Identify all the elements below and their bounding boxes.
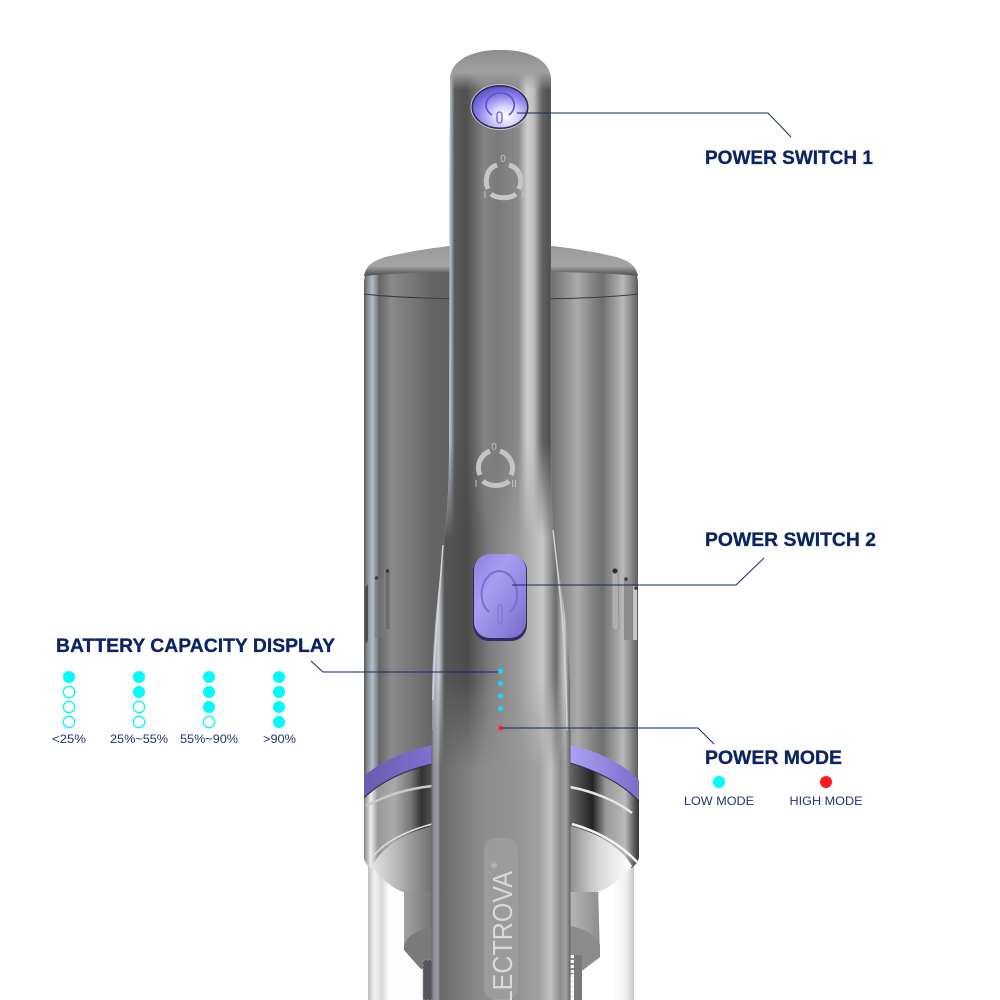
- indicator lights: [498, 668, 503, 731]
- registered mark: ®: [490, 862, 499, 868]
- leader: power mode: [501, 728, 714, 744]
- side vents right: [612, 568, 638, 640]
- power switch 2 button: [473, 554, 527, 641]
- vacuum product illustration: [364, 40, 639, 1000]
- handle and lower spine: [430, 40, 572, 1000]
- cycle mark upper: I: [484, 190, 486, 201]
- leader: power switch 1: [517, 113, 791, 137]
- leader: battery display: [311, 661, 498, 672]
- level: over 90%: [263, 671, 296, 746]
- heading: power switch 2: POWER SWITCH 2: [705, 530, 876, 551]
- level: under 25%: <25%: [52, 732, 86, 746]
- cycle mark upper: 0: [500, 154, 506, 165]
- level: 55 to 90%: 55%~90%: [180, 732, 238, 746]
- level: over 90%: >90%: [263, 732, 296, 746]
- glass dust cup: [368, 850, 634, 1000]
- transparent ring section: [364, 755, 639, 868]
- hose left: [423, 960, 432, 1000]
- power mode legend: [684, 776, 862, 808]
- cycle mark lower: 0: [491, 442, 497, 453]
- logo plate: [484, 838, 518, 1000]
- heading: power mode: POWER MODE: [705, 748, 842, 769]
- top cap shoulder: [364, 243, 638, 276]
- lower spine edge lines: [432, 730, 570, 1000]
- connector shade right: [570, 926, 600, 975]
- high mode: HIGH MODE: [790, 794, 862, 808]
- connector shade left: [404, 926, 432, 975]
- inner tube left: [404, 885, 432, 975]
- level: under 25%: [52, 671, 86, 746]
- low mode: [684, 776, 754, 808]
- bowl right: [570, 826, 632, 892]
- inner tube right: [570, 885, 600, 975]
- handle edge lines: [433, 545, 443, 700]
- cap seam: [364, 294, 638, 299]
- violet ring: [364, 745, 639, 801]
- heading: power switch 1: POWER SWITCH 1: [705, 148, 873, 169]
- low mode: LOW MODE: [684, 794, 754, 808]
- cycle mark lower: II: [511, 479, 517, 490]
- level: 25 to 55%: [110, 671, 168, 746]
- high mode: [790, 776, 862, 808]
- bowl left: [372, 826, 432, 892]
- leader: power switch 2: [512, 558, 764, 585]
- heading: battery capacity display: BATTERY CAPACITY DISPLAY: [56, 636, 335, 657]
- level: 25 to 55%: 25%~55%: [110, 732, 168, 746]
- battery legend: [52, 671, 296, 746]
- level: 55 to 90%: [180, 671, 238, 746]
- clear ring highlights: [366, 786, 637, 862]
- hose right: [572, 955, 582, 1000]
- cycle mark upper: [484, 154, 527, 201]
- main body cylinder: [364, 243, 638, 868]
- cycle mark lower: [475, 442, 517, 490]
- side vents left: [365, 569, 390, 644]
- power switch 1 button: [471, 84, 529, 130]
- cycle mark upper: II: [521, 190, 527, 201]
- cycle mark lower: I: [475, 479, 477, 490]
